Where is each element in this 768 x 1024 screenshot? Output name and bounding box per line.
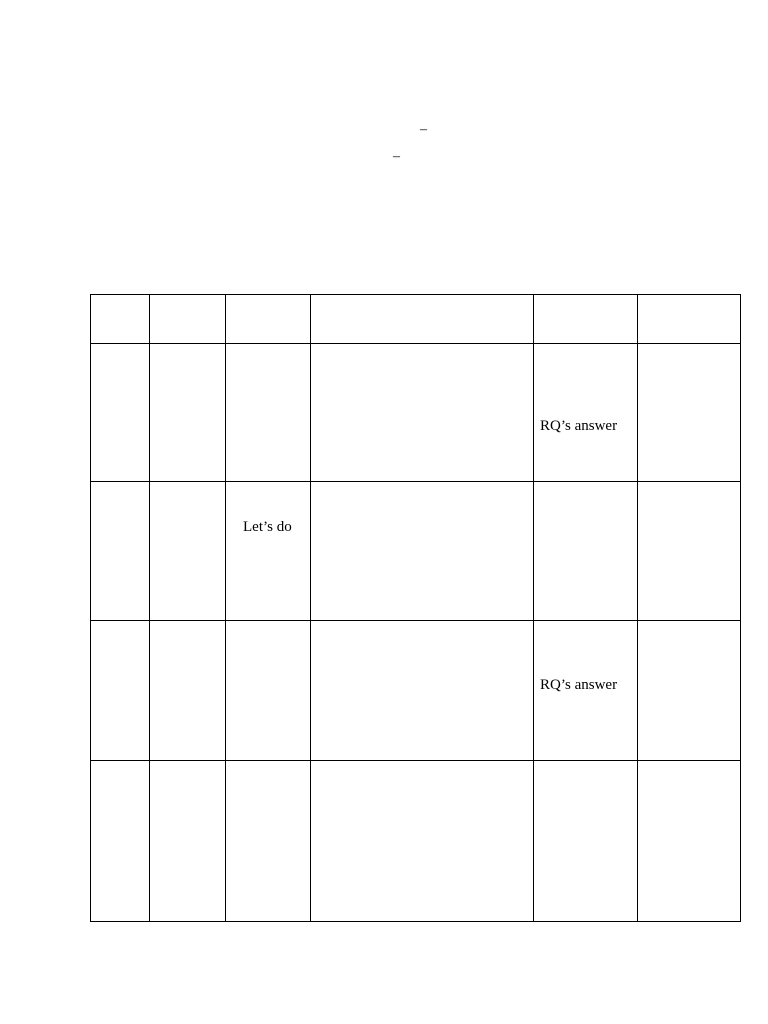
dash mark 1: – <box>420 122 427 137</box>
cell text: Let's do: Let’s do <box>243 519 292 535</box>
cell text: RQ's answer row 1: RQ’s answer <box>540 418 617 434</box>
dash mark 2: – <box>393 149 400 164</box>
cell text: RQ's answer row 3: RQ’s answer <box>540 677 617 693</box>
